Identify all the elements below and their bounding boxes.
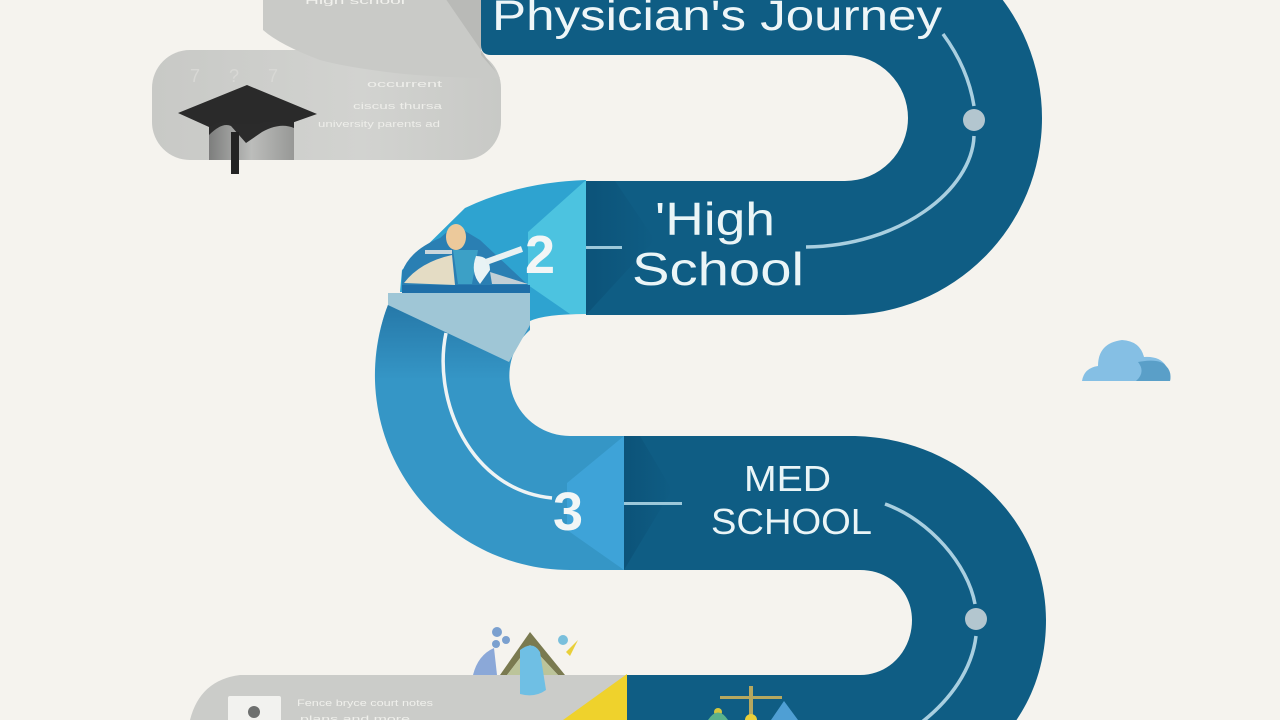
panel: grey card upper top-left [263,0,500,78]
icon: small square emblem [228,696,281,720]
winding road: light blue left curve [375,293,624,570]
label: Med School: SCHOOL [711,501,872,542]
connector: high school tick [586,246,622,249]
panel: step 2 segment [400,180,586,321]
panel: folded pale strip [375,293,530,380]
panel: grey card lower top-left [152,50,501,160]
card text lines [297,698,434,720]
icon: balance scale [708,686,798,720]
faint card marks: 7 ? 7 [190,66,278,86]
icon: cloud [1082,340,1170,381]
winding road: lower right curve [624,436,1046,720]
winding road: dark blue top and upper right curve [481,0,1042,315]
card text lines: occurrent [367,79,443,89]
label: High School: 'High [655,193,775,245]
step number 2: 2 [525,225,555,285]
label: Med School [711,458,872,542]
panel: bottom grey card [190,674,627,720]
illustration: tent and flowers [473,627,578,695]
timeline line: top right curve with node [806,34,985,247]
card text lines: Fence bryce court notes [297,698,434,708]
illustration: student at desk [402,224,530,293]
step number 3: 3 [553,482,583,542]
panel: step 3 segment [443,333,624,570]
shading: med school band [624,436,672,570]
card text lines: university parents ad [318,119,440,129]
icon: graduation cap [178,85,317,174]
connector: med school tick [624,502,682,505]
label: High School [632,193,804,295]
timeline line: lower right curve with node [885,504,987,720]
label: High School: School [632,243,804,295]
card text lines [318,79,443,129]
yellow wedge [563,674,627,720]
shading: high school band [586,181,655,315]
label: Med School: MED [744,458,831,499]
card text lines: ciscus thursa [353,101,442,111]
curved connector line [443,333,552,498]
